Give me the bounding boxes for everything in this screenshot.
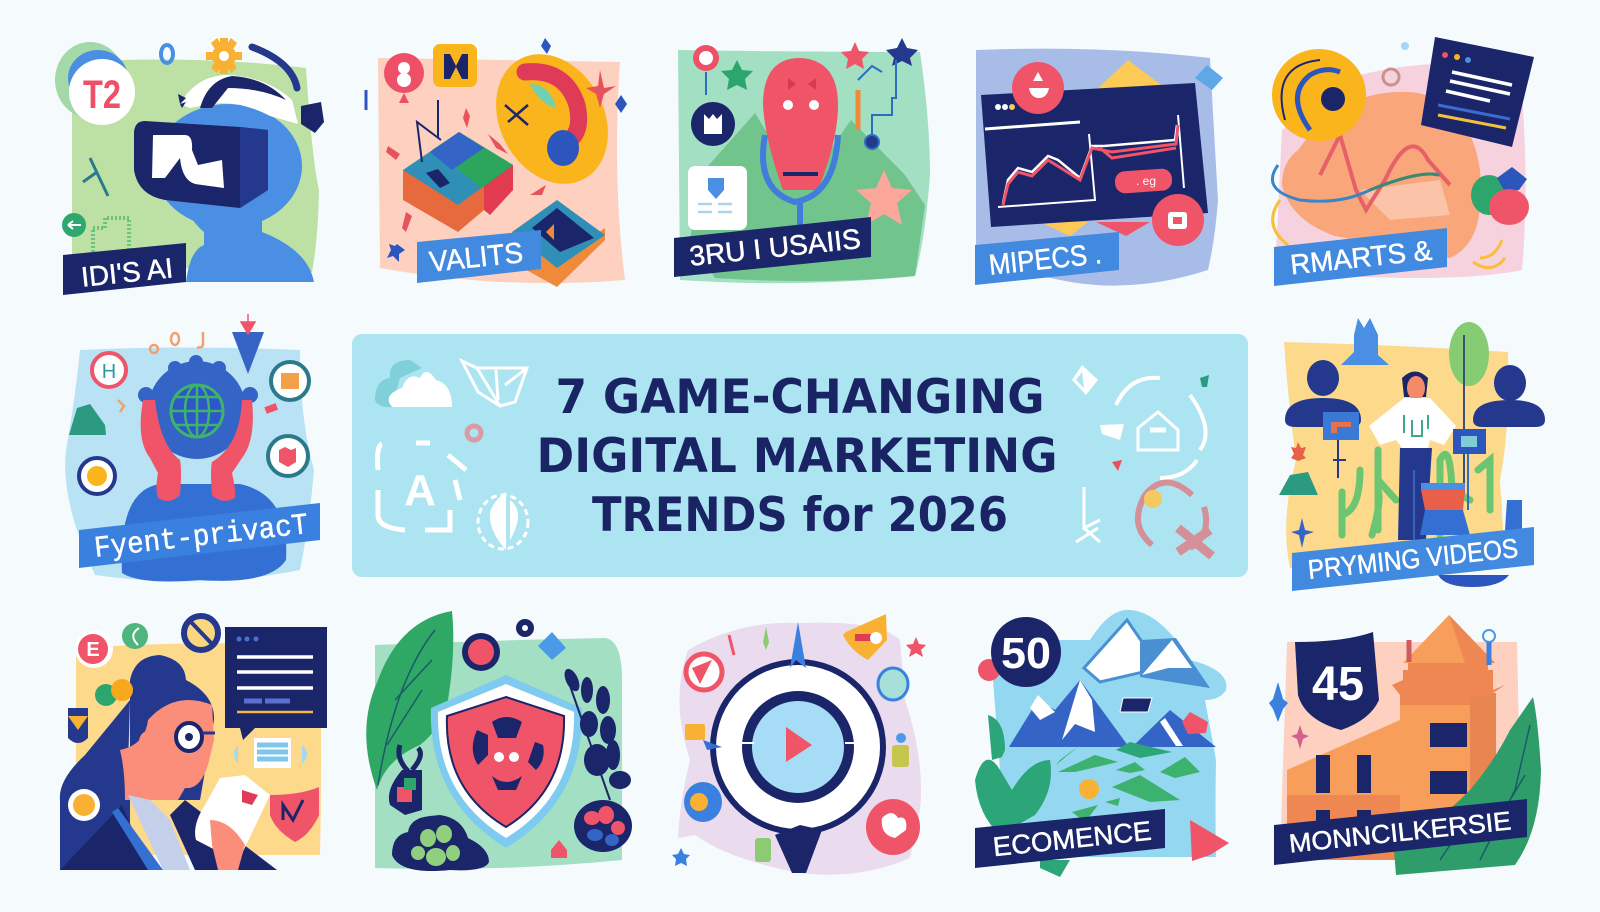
icon: compass needle bottom [775,825,822,873]
icon: red camera circle [1096,194,1204,246]
icon: red play arrow [1190,820,1229,861]
icon: right blue sign [1453,429,1486,510]
icon: folding chair [1076,487,1100,542]
icon: badge T2: T2 [83,73,121,117]
illustration: orange blob with waves [1272,92,1481,258]
label: MIPECS: MIPECS . [987,238,1103,282]
label: RMARTS [1274,228,1447,286]
panel: video people tile [1279,318,1545,591]
icon: tower figures [1409,630,1495,665]
panel: privacy tile [65,314,320,581]
icon: green tree [1449,322,1489,500]
figure: left person [1285,360,1361,427]
icon: white document card [688,166,747,230]
icon: letter A frame: A [404,466,436,515]
icon: E badge [75,630,113,668]
icon: blue cut tag [1505,500,1522,530]
icon: yellow badge [892,733,909,767]
icon: yellow curves [1473,240,1505,268]
icon: pink target ring [1383,69,1399,85]
icon: green badge [755,838,771,862]
icon: blue diamond [538,632,566,660]
icon: blue drop and red arrow [232,314,264,374]
icon: blue sparkles [366,38,627,262]
title: 7 GAME-CHANGING [556,370,1044,425]
icon: navy shield with number: 45 [1312,658,1364,711]
icon: red light bulb [763,58,838,190]
icon: yellow M tile [433,44,477,87]
icon: navy number badge 50: 50 [1001,629,1051,678]
title [536,370,1058,543]
icon: glasses [176,723,215,751]
icon: maple and teal hill [1279,442,1318,495]
title: DIGITAL MARKETING [536,429,1058,484]
chart: navy dashboard [981,83,1208,227]
icon: basket outline [462,361,527,406]
icon: red shield [270,787,319,842]
icon: no gear [184,616,218,650]
icon: cloud [375,360,452,407]
icon: blue diamond [1195,65,1223,90]
icon: confetti [386,70,616,232]
icon: red letter circle: H [102,361,116,383]
icon: microphone stand [763,135,838,232]
label: PRYMING VIDEOS: PRYMING VIDEOS [1307,533,1519,585]
icon: E badge: E [86,639,100,661]
icon: white paper in hand [195,775,270,870]
chart: navy dashboard: . eg [1136,174,1156,188]
label: RMARTS: RMARTS & [1289,235,1434,280]
icon: blue clock circle [878,668,908,700]
illustration: green hills [690,113,925,281]
icon: yellow ellipse with red arc [474,35,630,203]
panel: analytics tile [975,49,1223,286]
icon: coin circle [79,458,115,494]
label: ECOMENCE: ECOMENCE [991,816,1153,862]
illustration: vine [561,667,631,800]
label: MONNCILKERSIE [1274,799,1527,865]
icon: hat badge [68,708,88,743]
icon: stepped arrow line [858,60,896,149]
figure: right person [1473,365,1545,427]
icon: pink ring [467,426,481,440]
label: privacy banner: Fyent-privacT [93,509,310,567]
icon: pink gauge and cross [1138,482,1212,556]
icon: mail bubble [271,362,309,400]
icon: teal hill [69,404,106,435]
icon: left foliage [975,715,1070,877]
icon: navy speech bubble [225,627,327,740]
panel: title banner [352,334,1248,577]
icon: blue oval [161,45,173,63]
panel: VALITS tile [366,35,630,287]
icon: yellow diamond lower [1040,222,1088,236]
icon: red heart bubble [866,799,920,855]
icon: white peaks at top [1084,620,1210,688]
icon: red letter circle [92,353,126,387]
icon: orange tag [685,724,705,740]
illustration: blue dome [122,484,286,581]
icon: blue tower [1341,318,1389,365]
label: IDI'S AI: IDI'S AI [80,252,174,293]
icon: pink star [856,170,912,225]
panel: ecommerce mountains tile [975,610,1229,877]
icon: heart pin [693,45,719,95]
label: VALITS: VALITS [428,237,525,279]
icon: blue sparkle [1291,518,1314,548]
icon: small red tag [264,403,278,414]
icon: green star [721,60,753,90]
icon: yellow location coin [1079,779,1099,799]
icon: red tube [1420,483,1470,535]
icon: badge T2 [55,42,135,125]
icon: letter A frame [378,443,466,530]
figure: central woman [1369,372,1456,540]
icon: orange gear [206,38,242,74]
panel: shield tile [366,611,632,871]
icon: red prohibited bird [686,654,722,690]
icon: red star [841,42,869,69]
icon: VR headset strap [178,75,324,133]
icon: shield [431,675,582,848]
icon: green sprout pot [389,745,422,815]
icon: orange megaphone tag [843,614,887,660]
icon: navy document [1421,37,1534,147]
icon: blue sparkle [1269,682,1288,722]
icon: VR goggle [134,121,268,208]
illustration: blue dome under label [1438,575,1509,587]
icon: navy shield with number [1295,632,1379,730]
icon: thumbs-up badge [68,789,100,821]
icon: navy cross tick [83,158,108,196]
panel: castle tile [1269,615,1541,875]
icon: blue star [672,848,690,866]
icon: navy number badge 50 [978,617,1061,687]
icon: light blue dot [1401,42,1409,50]
icon: needle pointer [703,740,722,750]
illustration: orange building [1287,615,1505,860]
icon: loop ring with house [1100,375,1209,478]
icon: red bubble [268,436,308,476]
icon: red pin [1182,712,1208,734]
icon: navy pin [516,619,534,637]
icon: red gem circle [462,633,500,671]
title: TRENDS for 2026 [592,488,1008,543]
icon: green arrow chip [62,213,86,237]
figure: blue head and shoulders [154,104,314,282]
icon: C badge [122,623,148,649]
icon: orange glyphs [118,332,203,412]
icon: red pin badge [384,53,424,103]
icon: green marker [763,627,769,650]
icon: target rings with play button [710,659,886,835]
chart: green bars [93,218,129,252]
label: IDI'S AI [63,243,186,295]
icon: green leaf [1394,697,1541,875]
icon: gear with globe [138,355,258,459]
icon: pink sparkle [1291,725,1309,749]
icon: red star [906,637,926,657]
panel: smart tile [1272,37,1534,286]
icon: navy star [886,38,918,66]
icon: striped document [234,738,307,768]
label: VALITS [417,230,541,283]
illustration: blue mountains [1009,680,1216,747]
icon: diamond outline [1072,365,1098,395]
icon: fruit cluster [1471,167,1529,225]
icon: yellow record circle [1272,49,1366,141]
icon: navy bush with green paw [392,815,489,871]
label: 3RU I USAIIS: 3RU I USAIIS [688,223,862,272]
icon: navy badge [691,102,735,146]
icon: small isometric cube [512,200,605,287]
label: ECOMENCE [975,809,1165,868]
illustration: green fields [1056,742,1200,822]
icon: striped badge [1120,698,1152,712]
figure: woman with long hair [60,655,277,870]
icon: headset strap arc [252,47,297,88]
icon: half disc [478,492,528,550]
illustration: cactus lines [1342,450,1490,535]
icon: left blue sign [1323,412,1359,478]
icon: red house [551,840,567,858]
panel: idea bulb tile [674,38,930,283]
panel: target video tile [672,614,926,875]
icon: compass needle top [790,622,806,668]
icon: red cupped hands [141,400,253,501]
icon: flower [574,800,632,852]
icon: isometric cube [403,100,513,232]
icon: blue moon circle [684,782,722,822]
icon: hair clip [95,679,133,706]
panel: woman with chat tile [60,616,327,870]
panel: VR AI tile [55,38,324,295]
icon: red smile circle [1012,62,1064,114]
icon: green leaf [366,611,453,790]
label: MONNCILKERSIE: MONNCILKERSIE [1288,805,1512,859]
icon: red marker top left [729,635,734,655]
icon: yellow diamond [1091,60,1165,95]
